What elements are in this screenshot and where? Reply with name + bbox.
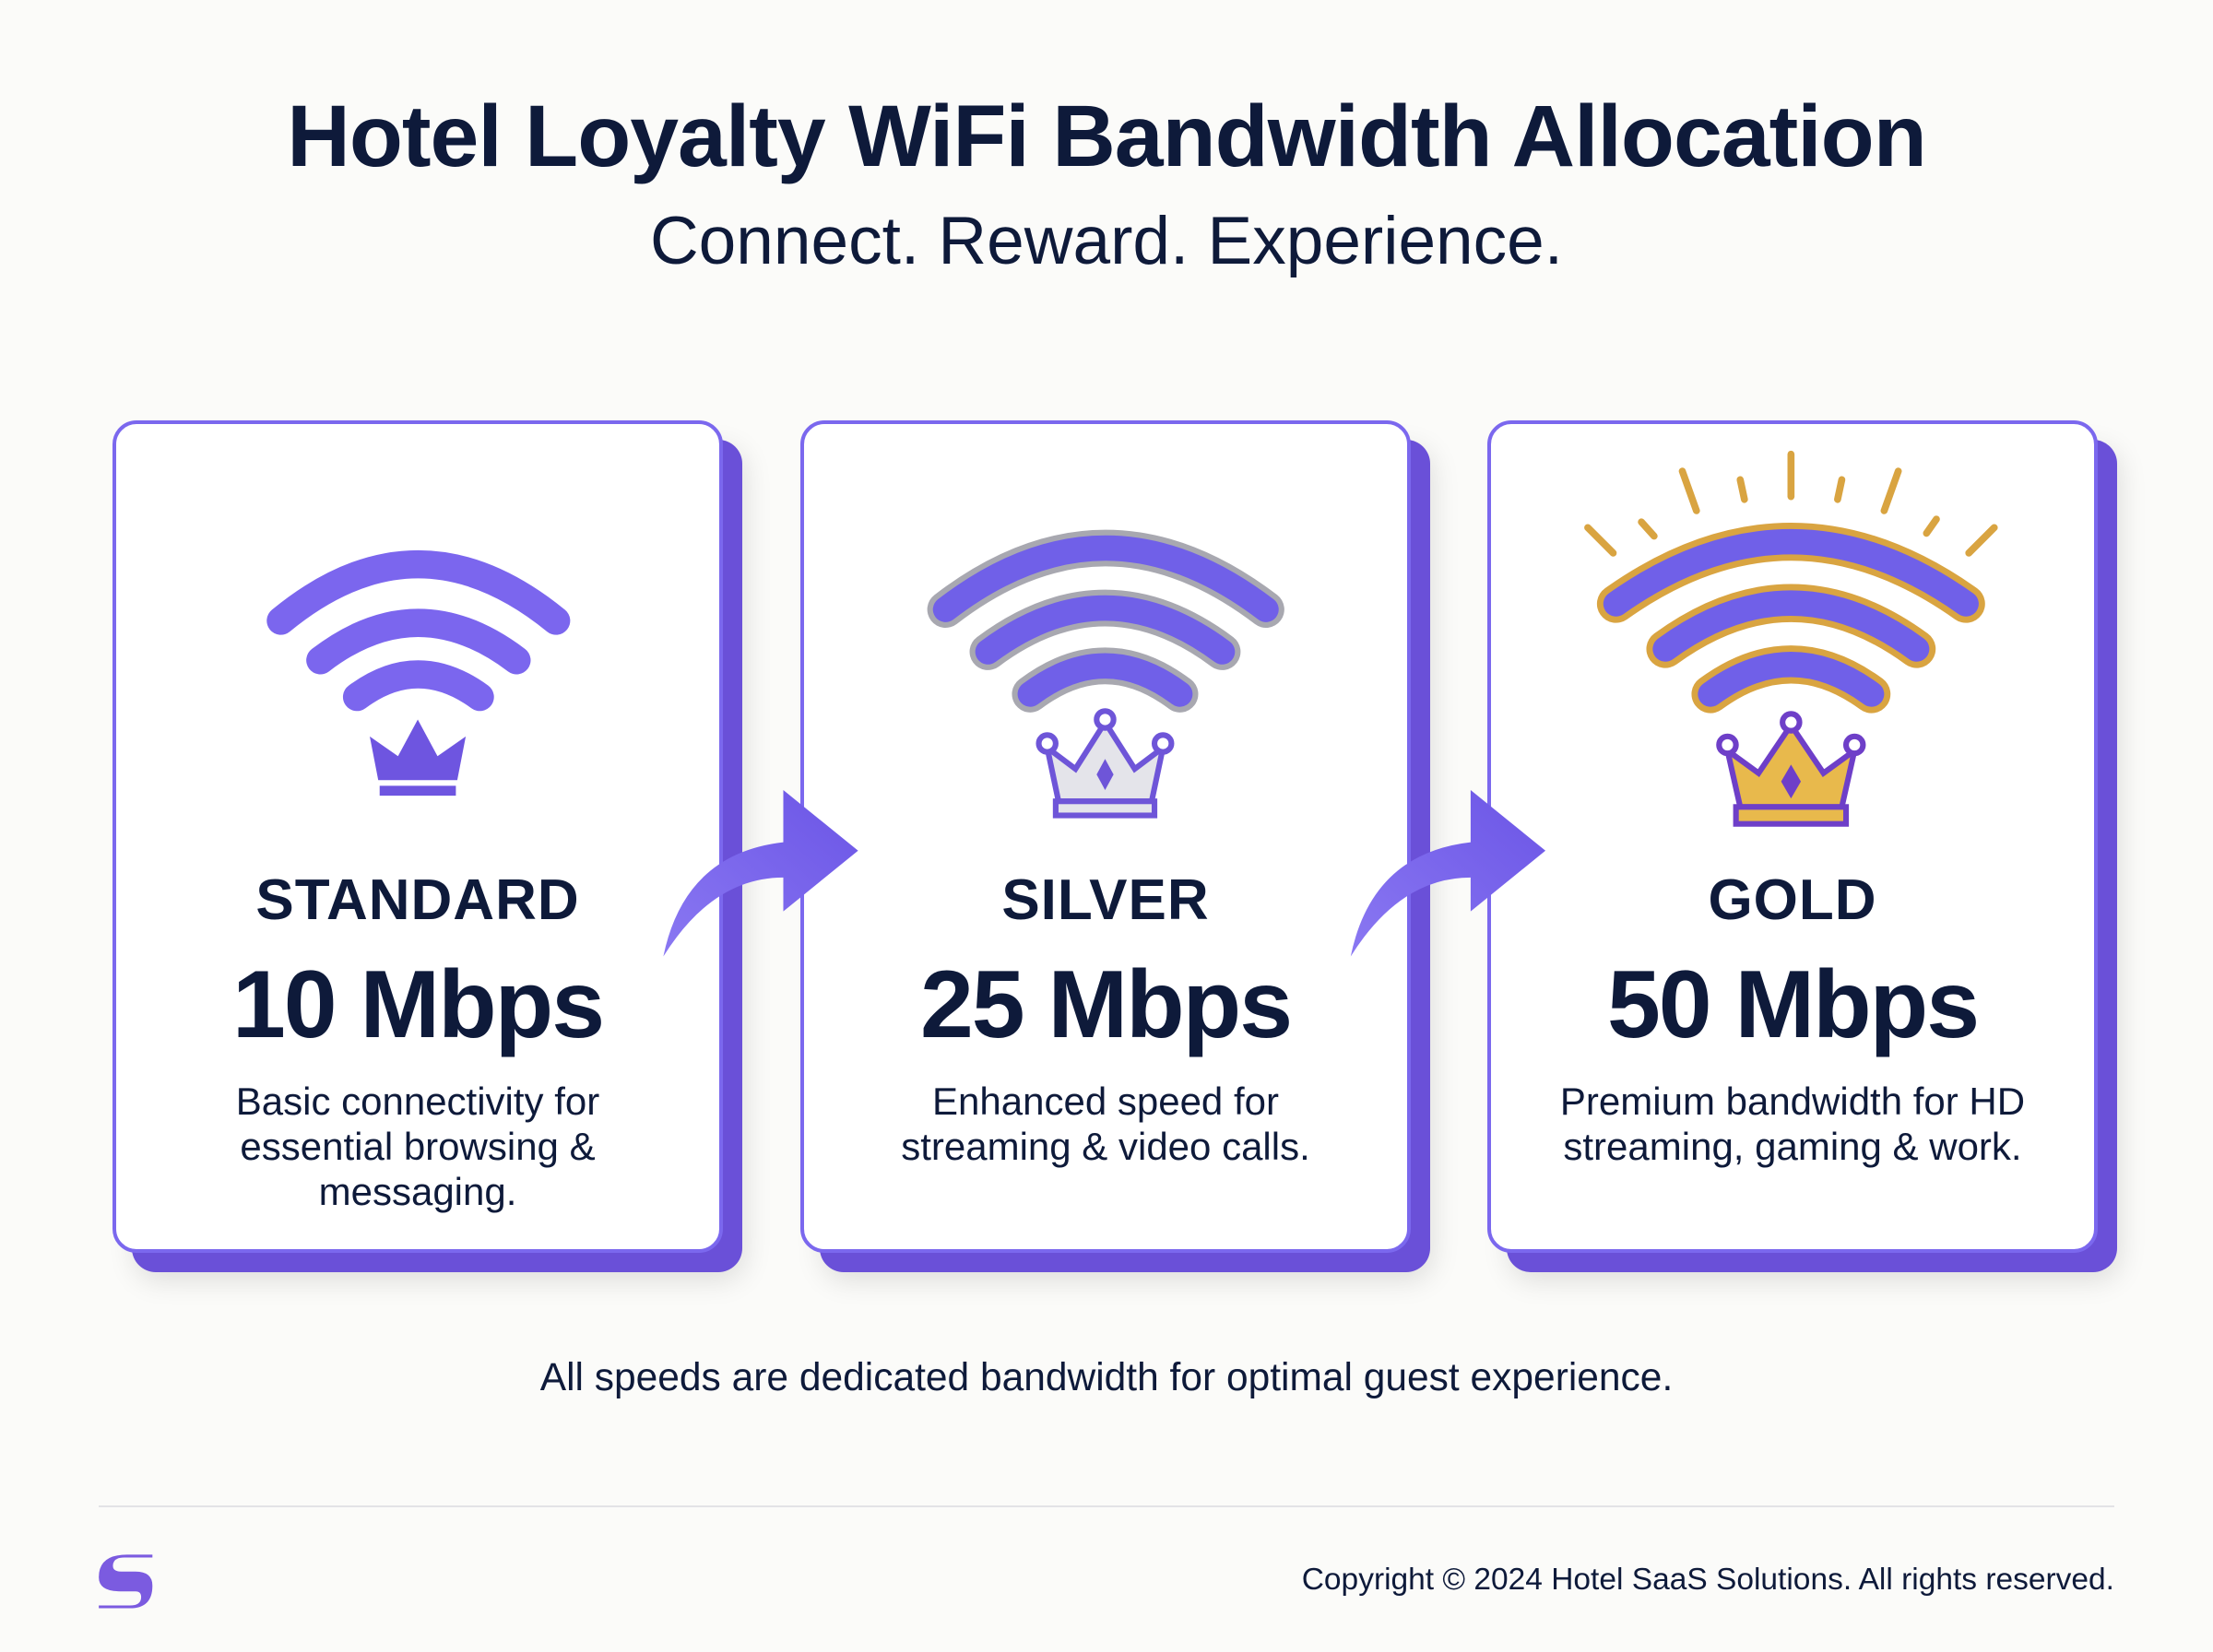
description: silver: Enhanced speed for: [932, 1080, 1279, 1123]
speed: 50 Mbps: 50 Mbps: [1607, 951, 1978, 1058]
description: standard: messaging.: [319, 1170, 516, 1213]
description: silver: streaming & video calls.: [901, 1125, 1310, 1168]
copyright: Copyright © 2024 Hotel SaaS Solutions. All rights reserved.: [1302, 1563, 2114, 1597]
description: gold: [1560, 1080, 2025, 1168]
subtitle: Connect. Reward. Experience.: [650, 204, 1563, 278]
speed: 10 Mbps: 10 Mbps: [232, 951, 603, 1058]
icon: silver wifi with crown: [946, 549, 1266, 816]
icon: gold wifi with crown and rays: [1588, 454, 1994, 824]
description: standard: essential browsing &: [240, 1125, 596, 1168]
description: standard: Basic connectivity for: [236, 1080, 599, 1123]
description: gold: streaming, gaming & work.: [1563, 1125, 2022, 1168]
description: gold: Premium bandwidth for HD: [1560, 1080, 2025, 1123]
logo mark: [99, 1554, 152, 1609]
panel: standard: [112, 420, 723, 1253]
tier label: standard: STANDARD: [255, 868, 580, 932]
description: standard: [236, 1080, 599, 1213]
icon: standard wifi with crown: [281, 564, 556, 796]
tier label: gold: GOLD: [1708, 868, 1877, 932]
description: silver: [901, 1080, 1310, 1168]
speed: 25 Mbps: 25 Mbps: [920, 951, 1291, 1058]
panel: silver: [800, 420, 1411, 1253]
arrow: standard to silver: [663, 790, 858, 957]
arrow: silver to gold: [1351, 790, 1545, 957]
title: Hotel Loyalty WiFi Bandwidth Allocation: [287, 88, 1926, 185]
panel: gold: [1487, 420, 2098, 1253]
tier label: silver: SILVER: [1001, 868, 1210, 932]
footnote: All speeds are dedicated bandwidth for optimal guest experience.: [540, 1356, 1673, 1399]
